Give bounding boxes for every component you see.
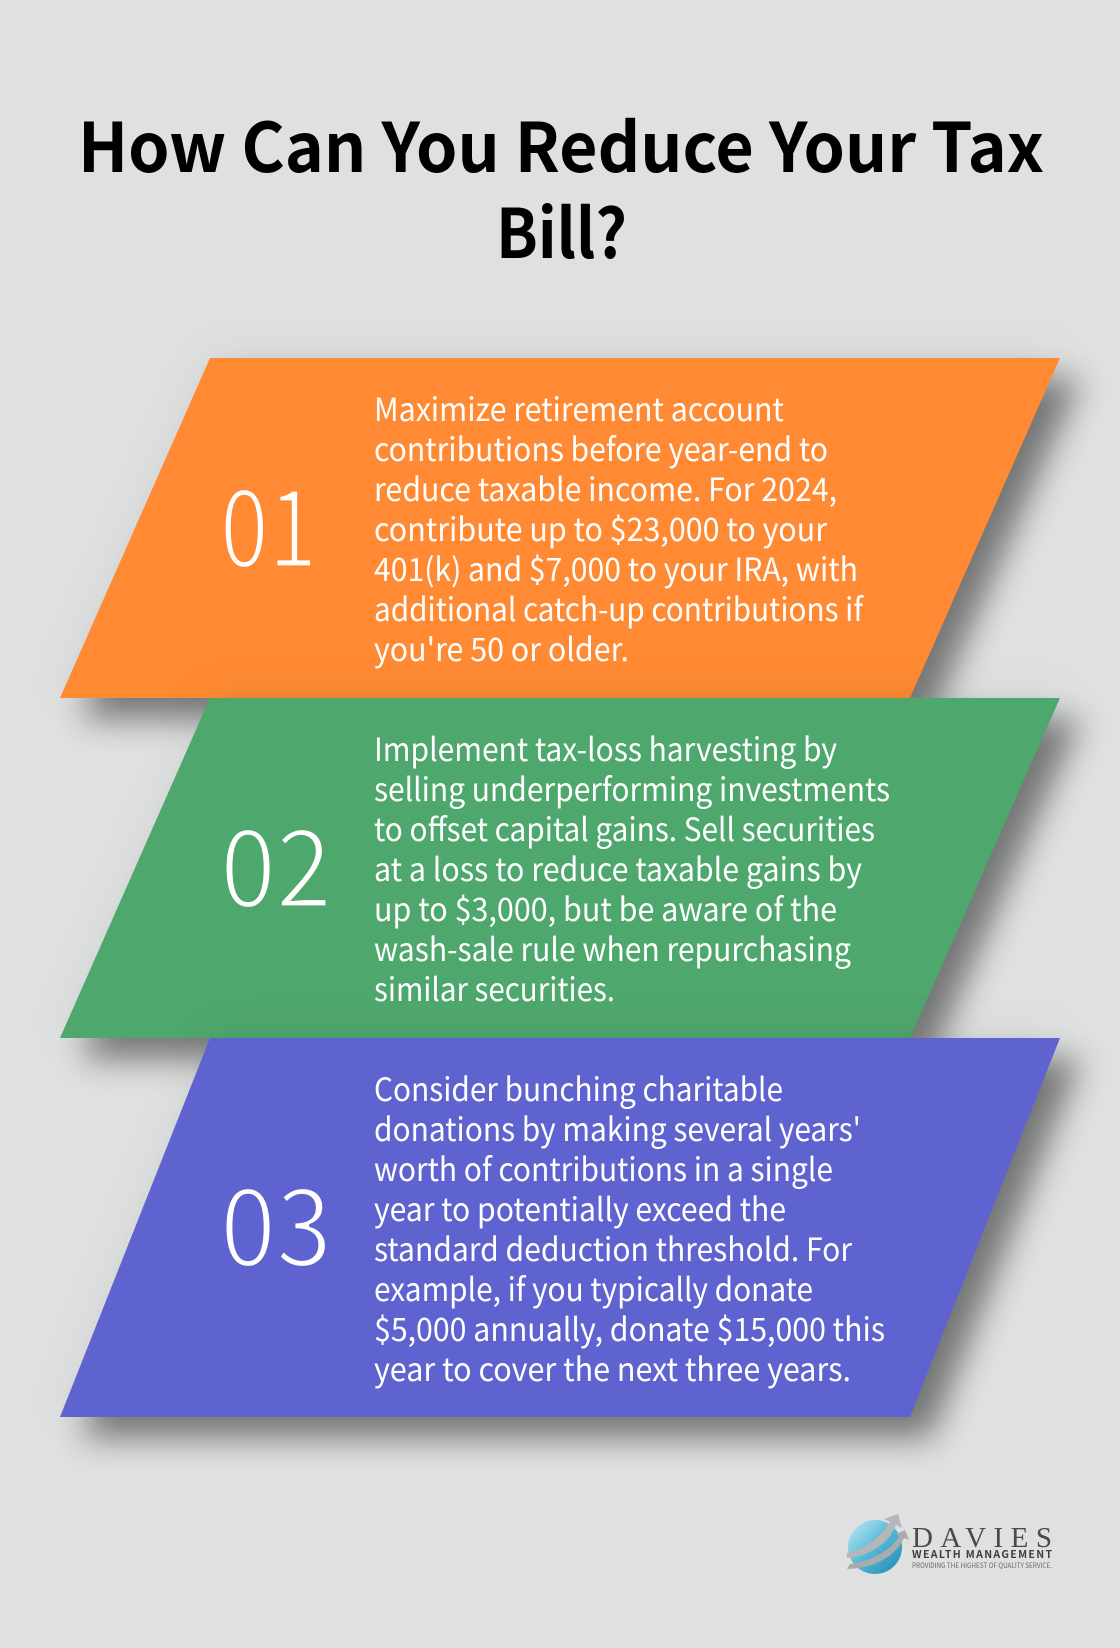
- panel: step 03 charitable bunching: [60, 1038, 1060, 1417]
- title: Bill?: [496, 179, 627, 278]
- tagline: PROVIDING THE HIGHEST OF QUALITY SERVICE.: [912, 1561, 1052, 1571]
- text block: step 01: contributions before year-end to: [374, 425, 828, 471]
- icon: globe with arrows: [847, 1514, 909, 1574]
- text block: step 02: wash-sale rule when repurchasing: [374, 925, 851, 971]
- text block: step 02: Implement tax-loss harvesting by: [374, 725, 837, 771]
- text block: step 01: Maximize retirement account: [374, 385, 784, 431]
- text block: step 02: selling underperforming investments: [374, 765, 890, 811]
- text block: step 03: year to cover the next three years.: [374, 1345, 851, 1391]
- panel: step 01 retirement contributions: [60, 358, 1060, 698]
- text block: step 03: year to potentially exceed the: [374, 1185, 786, 1231]
- text block: step 01: reduce taxable income. For 2024,: [374, 465, 837, 511]
- green parallelogram: [60, 698, 1060, 1038]
- text block: step 02: at a loss to reduce taxable gains by: [374, 845, 862, 891]
- text block: step 01: 401(k) and $7,000 to your IRA, with: [374, 545, 858, 591]
- wordmark DAVIES: DAVIES: [912, 1522, 1052, 1554]
- text block: step 03: example, if you typically donate: [374, 1265, 813, 1311]
- number 03: 03: [220, 1142, 332, 1298]
- text block: step 02: to offset capital gains. Sell securities: [374, 805, 875, 851]
- text block: step 01: you're 50 or older.: [374, 625, 629, 671]
- text block: step 03: [374, 1065, 885, 1391]
- text block: step 01: [374, 385, 864, 671]
- text block: step 03: standard deduction threshold. For: [374, 1225, 853, 1271]
- title: [78, 93, 1044, 278]
- text block: step 01: contribute up to $23,000 to your: [374, 505, 828, 551]
- title: How Can You Reduce Your Tax: [78, 93, 1044, 192]
- text block: step 03: Consider bunching charitable: [374, 1065, 783, 1111]
- logo: Davies Wealth Management: [847, 1514, 1052, 1574]
- text block: step 03: $5,000 annually, donate $15,000 this: [374, 1305, 885, 1351]
- text block: step 02: [374, 725, 890, 1011]
- blue parallelogram: [60, 1038, 1060, 1417]
- number 02: 02: [220, 783, 332, 939]
- text block: step 03: donations by making several years': [374, 1105, 861, 1151]
- text block: step 02: up to $3,000, but be aware of the: [374, 885, 837, 931]
- text block: step 01: additional catch-up contributions if: [374, 585, 864, 631]
- orange parallelogram: [60, 358, 1060, 698]
- text block: step 02: similar securities.: [374, 965, 615, 1011]
- number 01: 01: [220, 443, 317, 599]
- wordmark WEALTH MANAGEMENT: WEALTH MANAGEMENT: [912, 1547, 1052, 1562]
- panel: step 02 tax-loss harvesting: [60, 698, 1060, 1038]
- text block: step 03: worth of contributions in a single: [374, 1145, 833, 1191]
